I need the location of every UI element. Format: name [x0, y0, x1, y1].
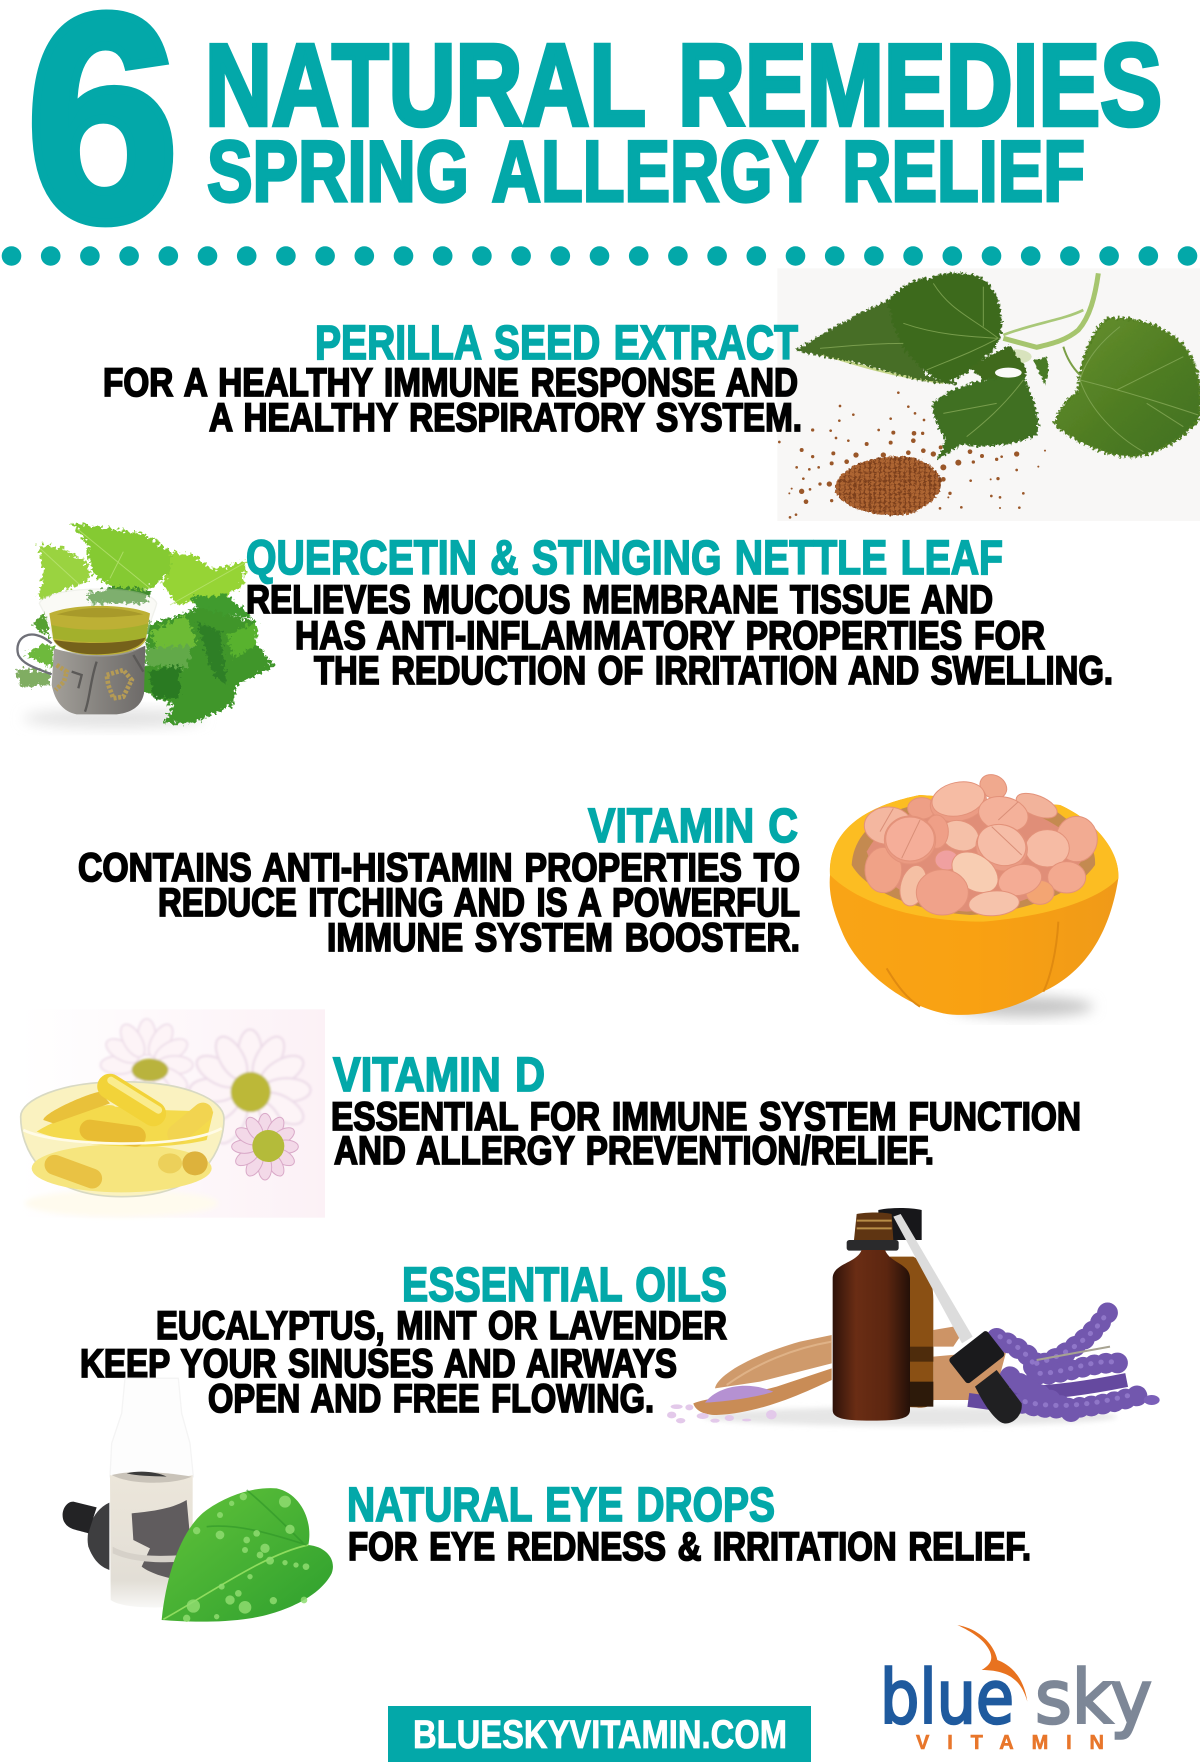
text: essential oils description: OPEN AND FREE FLOWING. — [208, 1377, 654, 1421]
panel: vitamin c — [78, 770, 1118, 1017]
panel: vitamin d — [20, 1009, 1081, 1218]
text: essential oils description: EUCALYPTUS, MINT OR LAVENDER — [156, 1304, 727, 1348]
text: essential oils description — [80, 1304, 727, 1421]
image: vitamin d capsules and daisies — [20, 1009, 325, 1218]
image: eye drop bottle and green leaf — [63, 1378, 333, 1622]
heading: vitamin c: VITAMIN C — [588, 800, 798, 853]
text: vitamin d description: AND ALLERGY PREVENTION/RELIEF. — [334, 1129, 934, 1173]
image: perilla leaves and seeds — [777, 268, 1200, 521]
text: perilla description — [103, 361, 802, 440]
panel: natural eye drops — [63, 1378, 1031, 1622]
banner: website url: BLUESKYVITAMIN.COM — [413, 1713, 787, 1757]
heading: natural eye drops: NATURAL EYE DROPS — [347, 1479, 775, 1532]
text: quercetin description: RELIEVES MUCOUS MEMBRANE TISSUE AND — [246, 578, 993, 622]
image: oil bottles, dropper, wooden spoons and lavender — [667, 1208, 1160, 1426]
text: essential oils description: KEEP YOUR SINUSES AND AIRWAYS — [80, 1342, 677, 1386]
logo: blue sky vitamin: sky — [1035, 1655, 1152, 1741]
text: vitamin c description: IMMUNE SYSTEM BOOSTER. — [327, 916, 800, 960]
text: vitamin d description — [331, 1095, 1081, 1173]
heading: quercetin and stinging nettle leaf: QUERCETIN & STINGING NETTLE LEAF — [246, 532, 1003, 585]
text: perilla description: A HEALTHY RESPIRATORY SYSTEM. — [209, 396, 802, 440]
text: perilla description: FOR A HEALTHY IMMUNE RESPONSE AND — [103, 361, 798, 405]
text: eye drops description: FOR EYE REDNESS & IRRITATION RELIEF. — [348, 1525, 1031, 1569]
heading: perilla seed extract: PERILLA SEED EXTRACT — [315, 317, 798, 370]
logo: blue sky vitamin — [880, 1625, 1152, 1754]
text: vitamin c description: CONTAINS ANTI-HISTAMIN PROPERTIES TO — [78, 846, 800, 890]
logo: blue sky vitamin: VITAMIN — [916, 1732, 1104, 1754]
panel: quercetin and stinging nettle leaf — [17, 523, 1113, 728]
panel: perilla seed extract — [103, 268, 1200, 521]
panel: essential oils — [80, 1208, 1160, 1426]
image: nettle leaves and tea cup — [17, 523, 275, 728]
image: orange bowl with tablets — [830, 770, 1118, 1017]
logo: blue sky vitamin: blue — [880, 1655, 1014, 1741]
heading: vitamin d: VITAMIN D — [333, 1049, 545, 1102]
text: vitamin c description: REDUCE ITCHING AND IS A POWERFUL — [158, 881, 800, 925]
text: quercetin description — [246, 578, 1113, 693]
heading: essential oils: ESSENTIAL OILS — [402, 1259, 727, 1312]
text: quercetin description: HAS ANTI-INFLAMMATORY PROPERTIES FOR — [295, 614, 1045, 658]
text: vitamin c description — [78, 846, 800, 960]
banner: website url — [388, 1706, 811, 1762]
